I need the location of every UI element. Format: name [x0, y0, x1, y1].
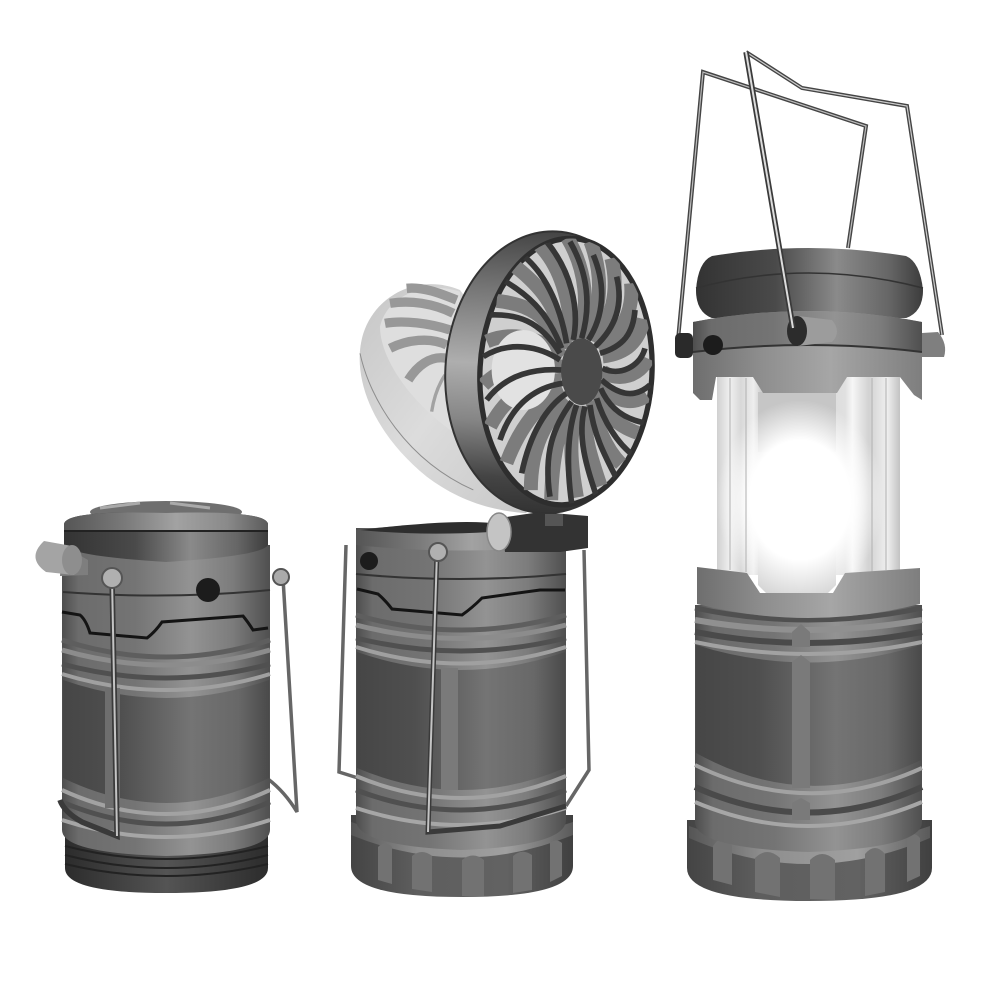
wire handle: outer — [746, 52, 942, 335]
pivot left — [102, 568, 122, 588]
fan rim — [438, 226, 661, 519]
body ribs — [356, 615, 566, 825]
fan head — [444, 230, 655, 514]
hinge — [487, 512, 588, 552]
lantern: open and lit, right — [675, 52, 945, 901]
lantern: with fan, centre — [339, 226, 669, 897]
wire handle: back — [678, 72, 866, 340]
body ribs — [695, 608, 922, 826]
ghost fan — [360, 284, 527, 513]
lantern: closed, left — [35, 501, 297, 893]
wire handle: front — [60, 578, 117, 836]
body — [356, 528, 566, 850]
side latch — [35, 541, 88, 576]
body — [695, 605, 922, 852]
pivot left — [675, 333, 693, 358]
illustration: three camping lanterns — [36, 50, 946, 901]
lens — [716, 375, 900, 600]
button — [360, 552, 378, 570]
lower collar — [697, 567, 920, 618]
body — [62, 545, 270, 856]
wire handle: back right — [268, 578, 297, 812]
wire handle: back left — [339, 545, 358, 778]
latch centre — [787, 316, 837, 346]
top collar — [693, 311, 922, 400]
recessed panel — [357, 652, 565, 790]
threaded bottom — [65, 835, 268, 893]
button — [703, 335, 723, 355]
vertical rib — [105, 688, 120, 808]
base ring — [351, 815, 573, 897]
zigzag seam — [357, 589, 565, 615]
top collar ring — [356, 522, 566, 550]
collar seam — [356, 574, 566, 579]
top collar seam — [63, 590, 270, 596]
fan lid — [64, 501, 268, 562]
pivot right — [273, 569, 289, 585]
wire handle: back right — [566, 550, 589, 806]
wire handle: front — [428, 552, 566, 832]
latch right — [922, 332, 945, 357]
wire handle: front — [746, 52, 793, 328]
recessed panel — [63, 680, 269, 803]
recessed panel — [696, 645, 921, 786]
body ribs — [62, 640, 270, 837]
zigzag seam — [62, 612, 268, 638]
fan hub — [561, 338, 602, 405]
vertical ribs — [792, 624, 810, 820]
button — [196, 578, 220, 602]
base ring — [687, 820, 932, 901]
fan interior — [473, 234, 659, 509]
pivot — [429, 543, 447, 561]
top cap — [696, 248, 923, 318]
fan blades — [480, 238, 652, 502]
vertical rib — [441, 668, 458, 790]
